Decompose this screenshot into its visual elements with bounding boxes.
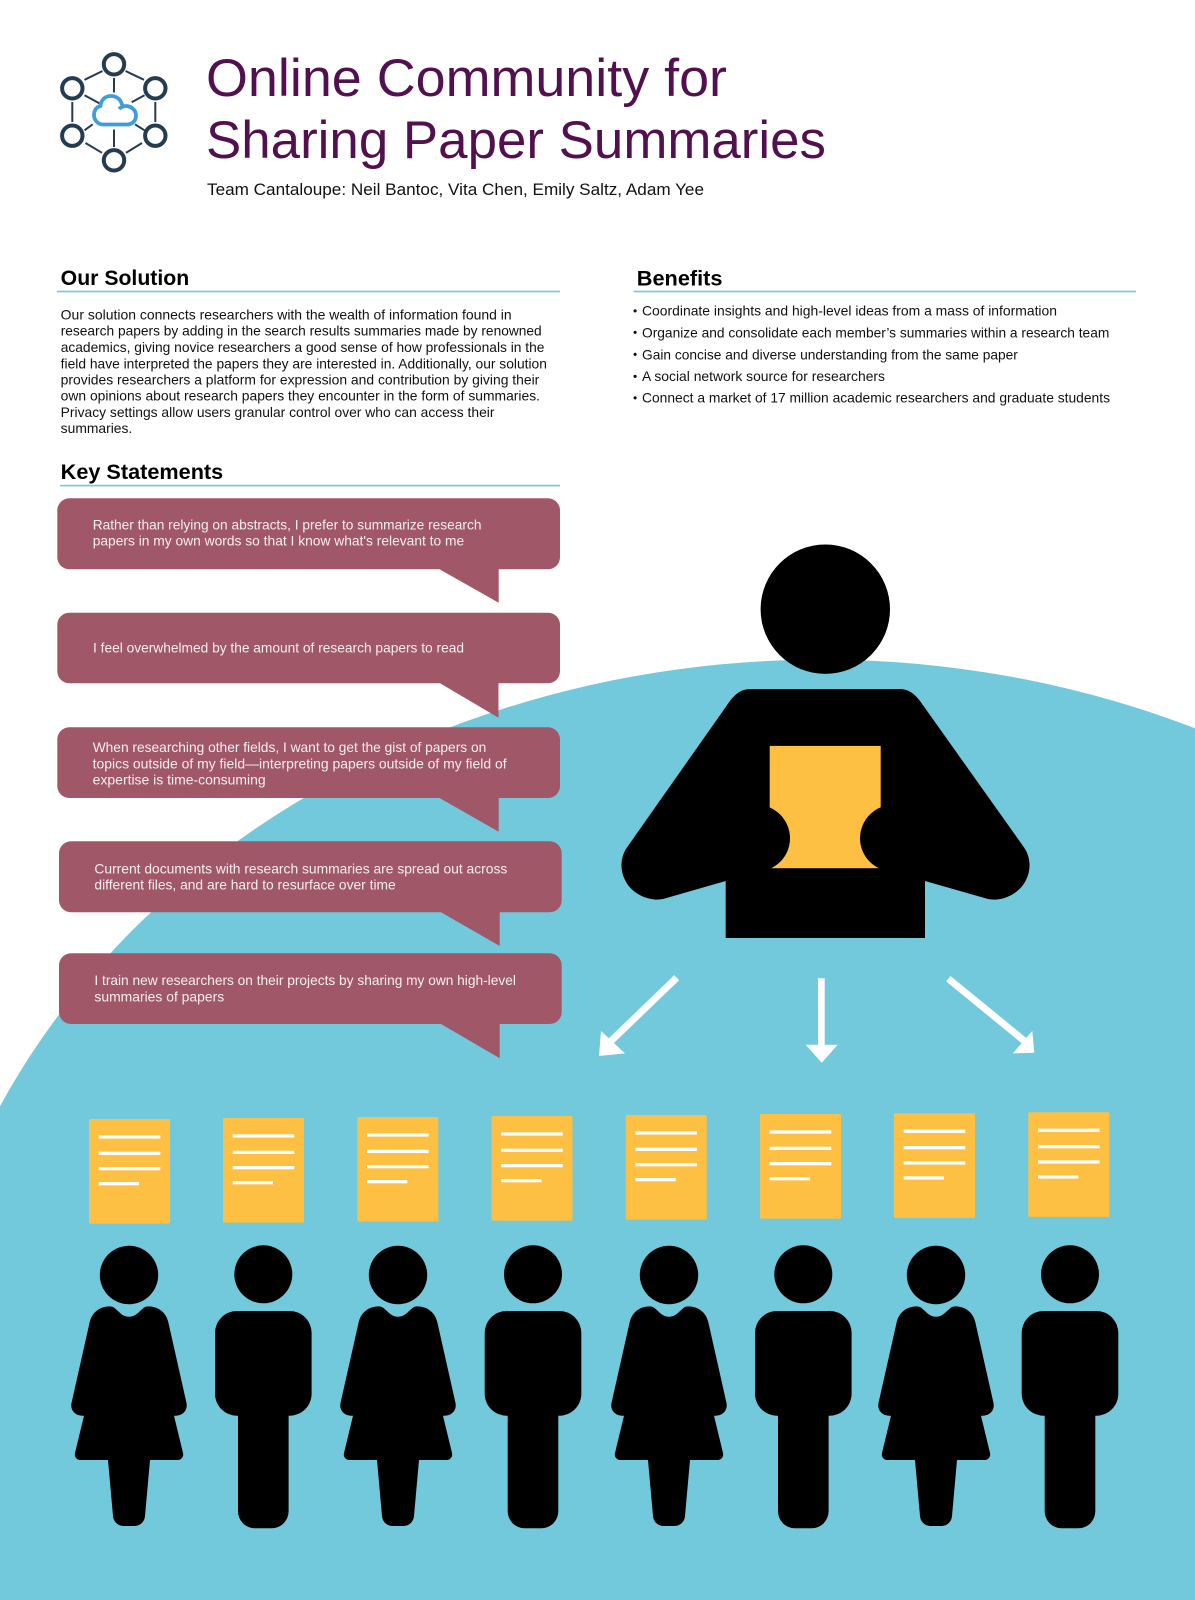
title: Sharing Paper Summaries [206,111,826,170]
text block: solution description: summaries. [61,421,132,436]
heading: benefits: Benefits [637,268,722,291]
icon: woman 4 [878,1246,994,1526]
text block: solution description: field have interpreted the papers they are interested in. Additionally, our solution [61,356,547,371]
callout: statement 5: summaries of papers [94,989,224,1004]
icon: document 8 [1028,1112,1109,1217]
callout: statement 4: Current documents with research summaries are spread out across [94,861,507,876]
icon: man 2 [485,1245,581,1528]
callout: statement 4: different files, and are hard to resurface over time [94,878,396,893]
callout: statement 4 [59,841,562,946]
list: benefits bullets: A social network source for researchers [642,369,885,384]
text block: solution description: Privacy settings allow users granular control over who can access their [61,405,495,420]
text block: solution description: research papers by adding in the search results summaries made by renowned [61,324,542,339]
icon: document 4 [492,1116,572,1221]
icon: network with cloud [62,54,165,170]
text block: solution description: provides researchers a platform for expression and contribution by giving their [61,372,540,387]
text block: solution description [61,307,547,436]
icon: woman 3 [611,1246,727,1526]
heading: our solution: Our Solution [61,267,189,290]
icon: document 5 [626,1115,707,1220]
icon: man 1 [215,1245,312,1528]
arrow: right [948,979,1034,1053]
callout: statement 1: papers in my own words so that I know what's relevant to me [93,534,465,549]
icon: man 3 [755,1245,852,1528]
icon: document 3 [357,1117,438,1222]
background: blue hill [0,660,1195,1600]
icon: woman 2 [340,1246,456,1526]
title: Online Community for [206,49,727,108]
callout: statement 3: topics outside of my field—interpreting papers outside of my field of [93,756,507,771]
callout: statement 1: Rather than relying on abstracts, I prefer to summarize research [93,517,481,532]
list: benefits bullets [633,304,1110,406]
text block: solution description: Our solution connects researchers with the wealth of information found in [61,307,512,322]
callout: statement 2 [57,613,560,718]
list: benefits bullets: • [633,304,637,318]
panel: key statements [57,461,562,1058]
callout: statement 3: When researching other fields, I want to get the gist of papers on [93,740,486,755]
icon: document 1 [89,1119,170,1224]
list: benefits bullets: • [633,391,637,405]
callout: statement 5: I train new researchers on their projects by sharing my own high-level [94,973,516,988]
callout: statement 3 [57,727,560,832]
icon: document 7 [894,1113,975,1218]
callout: statement 1 [57,498,560,603]
list: benefits bullets: Coordinate insights and high-level ideas from a mass of information [642,304,1057,319]
icon: document 2 [223,1118,304,1223]
list: benefits bullets: • [633,348,637,362]
icon: person holding paper [621,544,1030,938]
icon: woman 1 [71,1246,187,1526]
list: benefits bullets: Organize and consolidate each member’s summaries within a research team [642,325,1109,340]
subtitle: team names: Team Cantaloupe: Neil Bantoc, Vita Chen, Emily Saltz, Adam Yee [207,180,704,199]
heading: key statements: Key Statements [61,461,223,484]
row: community members [71,1245,1118,1528]
panel: our solution [57,267,560,436]
callout: statement 3: expertise is time-consuming [93,773,266,788]
icon: document 6 [760,1114,841,1219]
list: benefits bullets: Connect a market of 17 million academic researchers and graduate students [642,391,1110,406]
callout: statement 2: I feel overwhelmed by the amount of research papers to read [93,640,464,655]
arrow: center [806,978,838,1063]
callout: statement 5 [59,953,562,1058]
row: summary documents [89,1112,1109,1224]
list: benefits bullets: • [633,369,637,383]
text block: solution description: own opinions about research papers they encounter in the form of summaries. [61,389,540,404]
text block: solution description: academics, giving novice researchers a good sense of how professionals in the [61,340,545,355]
panel: benefits [633,268,1136,406]
list: benefits bullets: • [633,326,637,340]
arrow: left [599,978,677,1056]
title [206,49,826,170]
icon: man 4 [1022,1245,1118,1528]
list: benefits bullets: Gain concise and diverse understanding from the same paper [642,347,1018,362]
